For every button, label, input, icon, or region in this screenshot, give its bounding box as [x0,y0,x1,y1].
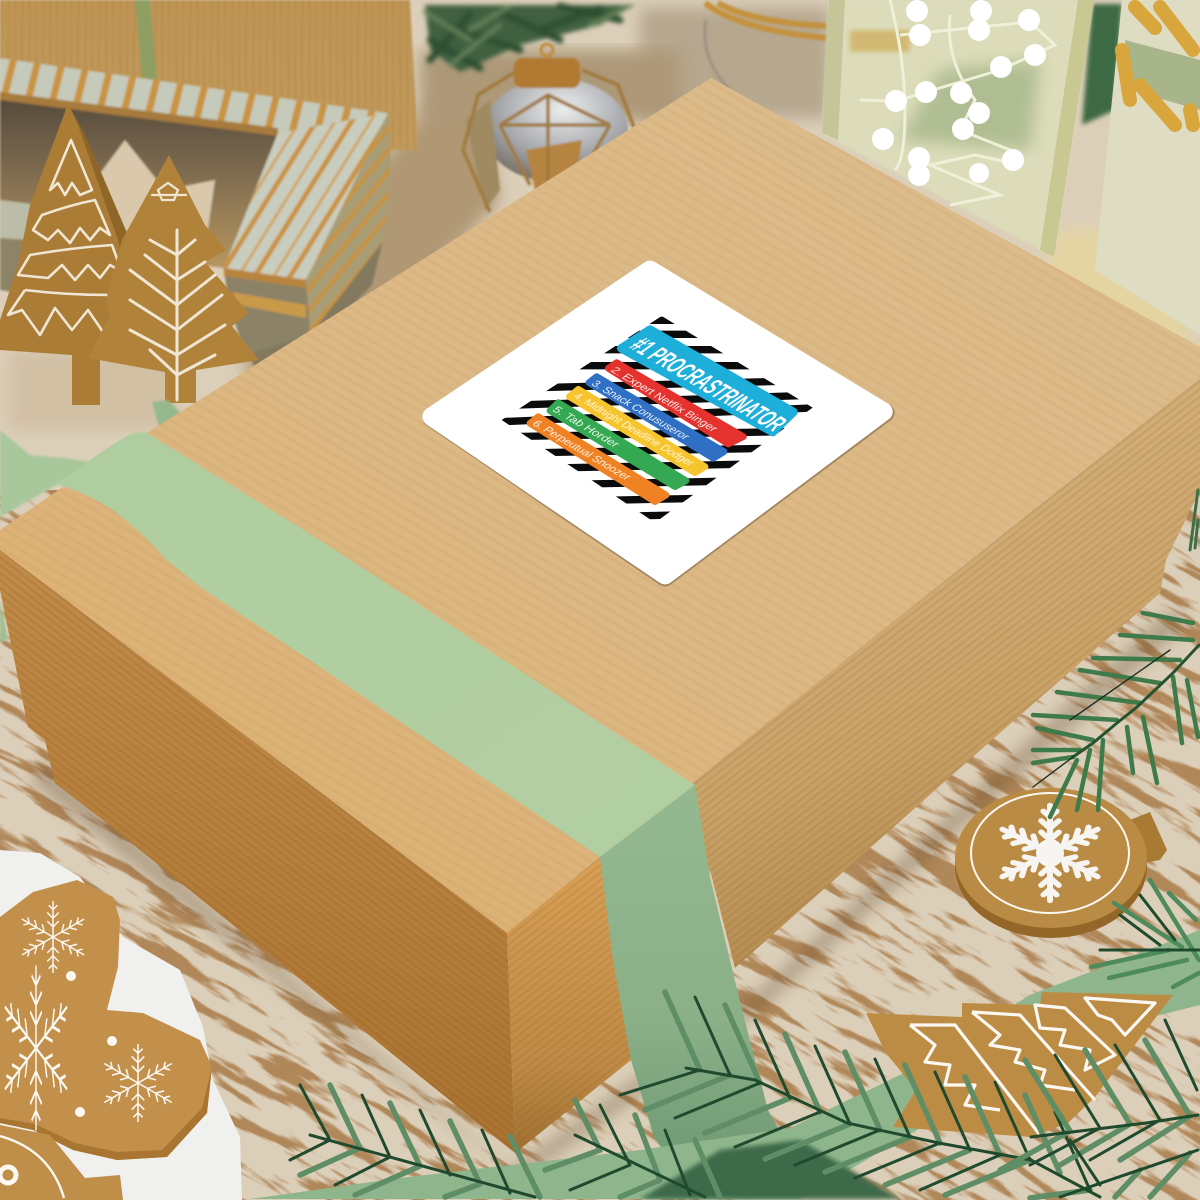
bar: 6. Perpeutual Snoozer: 6. Perpeutual Snoozer [529,419,634,482]
front panel [224,268,310,355]
bar: heading: #1 PROCRASTRINATOR [623,333,794,435]
top pine branch, out of focus [425,5,635,72]
ribbon hanging down front [600,785,790,1175]
gingerbread tree cookie on table [866,992,1173,1137]
box left face [0,550,515,1153]
gingerbread round cookie on plate [0,1125,123,1200]
snowflake icing [998,806,1102,900]
ribbon over top face [58,432,695,857]
pine sprig: bottom left [290,1085,540,1197]
sticker white base [432,270,883,575]
stacked lower layers [245,236,384,372]
right pine behind jars [1082,4,1122,125]
gingerbread tree: small [88,155,259,403]
glass jar with string lights [822,0,1094,257]
bar: 5. Tab Horder: 5. Tab Horder [549,405,622,450]
white plate [0,850,242,1200]
glass ornament with gold cage [463,44,635,212]
bar: 2. Expert Netflix Binger: 2. Expert Netflix Binger [608,366,720,434]
second glass jar with gold ribbon [1095,0,1200,335]
box right face [600,378,1200,968]
gold ring behind jar [705,3,826,90]
small ribbon scrap by tree [152,400,185,430]
box front corner sliver [507,857,631,1153]
white icing on large tree [8,140,122,335]
snowflake icing [2,901,175,1130]
gold strands [1122,7,1193,125]
lower left frame piece [0,200,40,240]
bar: 3. Snack Conususeror: 3. Snack Conususeror [588,379,692,442]
gingerbread mitten cookie [0,880,212,1160]
pine sprig: bottom centre-left [545,1100,720,1197]
ribbon lying on table [250,930,1200,1199]
pine needles at right edge of box [1190,490,1198,550]
bar: 5. Tab Horder [549,403,686,487]
bar: 3. Snack Conususeror [588,377,724,458]
right arm of frame [224,113,388,280]
bar: 4. Midnight Deadline Dodger: 4. Midnight Deadline Dodger [570,392,697,468]
white icing zigzags [910,998,1155,1135]
pine sprig: bottom right [1000,1020,1198,1197]
pine sprig: bottom centre [620,992,1100,1198]
window interior [0,97,278,268]
gingerbread tree: large [0,104,130,405]
side panel [306,113,391,335]
ornament gold cap [514,58,580,88]
bar: 6. Perpeutual Snoozer [529,417,666,502]
white icing branches [130,183,225,400]
sticker shadow [432,271,885,577]
pine sprig: top right [1033,613,1199,817]
green ribbon wrapped around box [58,432,790,1175]
background kraft gift box [0,0,418,150]
black diagonal stripes [487,320,820,519]
bar: 2. Expert Netflix Binger [608,363,743,444]
box top face [0,78,1200,933]
table shadow under box [30,610,1190,1180]
top arm of frame [0,58,388,133]
bar: heading [621,330,794,435]
gingerbread ball ornament cookie [955,788,1167,938]
sticker [432,270,885,577]
green ribbon on background box [135,0,157,80]
loose ribbon at left edge [0,430,90,642]
fairy lights [872,0,1046,186]
dark foliage under bottom sprigs [640,1140,900,1199]
string wire [860,0,1055,205]
striped gift box with window [0,58,391,372]
pine sprig: right middle [1091,880,1199,987]
gold cage wires [463,70,635,212]
